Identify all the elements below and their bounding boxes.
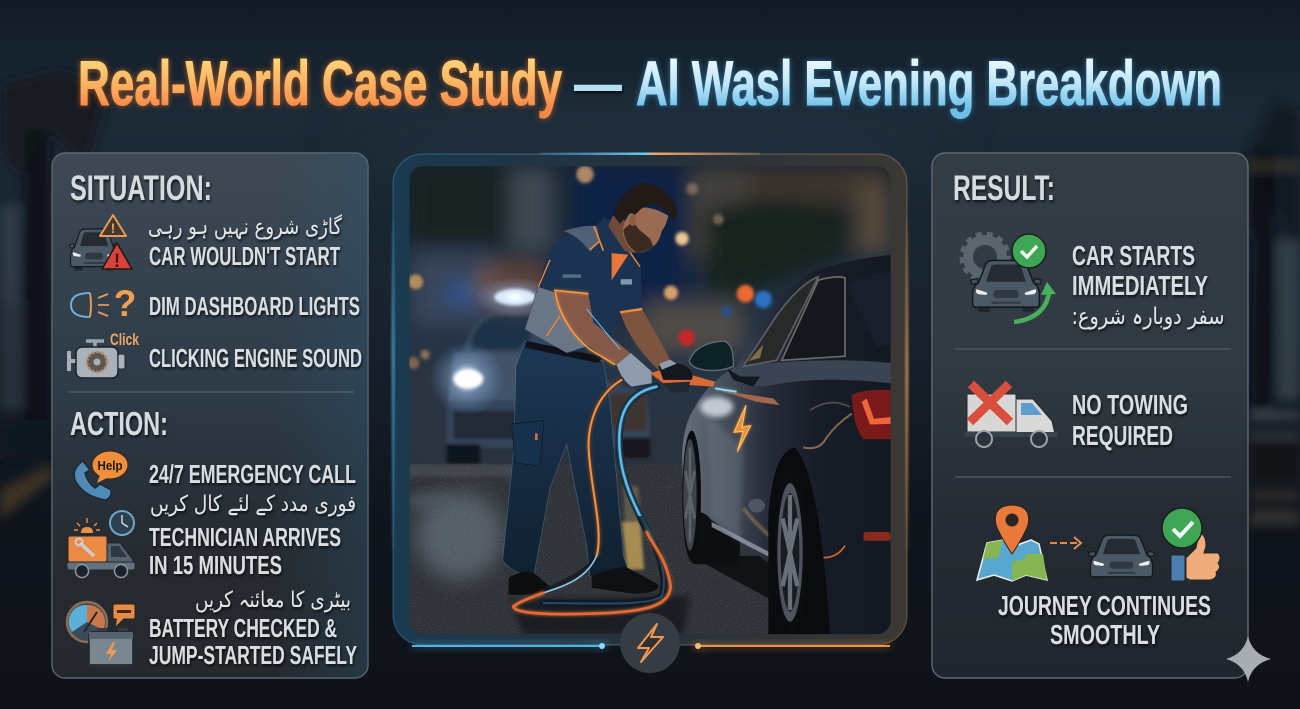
mirror xyxy=(727,368,760,387)
label: journey continues smoothly xyxy=(998,590,1211,650)
label: car starts immediately: CAR STARTS xyxy=(1072,240,1195,271)
label: technician arrives in 15 minutes: IN 15 MINUTES xyxy=(149,550,282,580)
label: battery checked and jump-started safely: JUMP-STARTED SAFELY xyxy=(149,640,357,670)
icon: phone with help bubble xyxy=(74,451,128,500)
label: technician arrives in 15 minutes: TECHNICIAN ARRIVES xyxy=(149,522,341,552)
label: battery checked and jump-started safely: BATTERY CHECKED & xyxy=(149,613,337,643)
bokeh and headlights xyxy=(407,166,772,415)
label: no towing required xyxy=(1072,389,1188,451)
urdu: battery inspection: بیٹری کا معائنہ کریں xyxy=(195,588,351,613)
label: no towing required: REQUIRED xyxy=(1072,420,1173,451)
shoes xyxy=(508,572,552,595)
icon: phone with help bubble: Help xyxy=(98,458,123,473)
label: car starts immediately: IMMEDIATELY xyxy=(1072,270,1208,301)
icon: gauge and battery xyxy=(67,602,135,667)
glowing bolt on car xyxy=(734,405,751,452)
body reflections xyxy=(700,397,733,417)
label: car starts immediately xyxy=(1072,240,1208,301)
icon: service truck with clock xyxy=(67,511,135,578)
jumper cables xyxy=(513,380,671,614)
icon: car with warnings: ! xyxy=(111,220,115,236)
icon: tow truck crossed out xyxy=(965,384,1058,447)
icon: car starts with check and arrow xyxy=(962,234,1056,322)
label: journey continues smoothly: SMOOTHLY xyxy=(1050,619,1160,650)
label: technician arrives in 15 minutes xyxy=(149,522,341,580)
icon: lightning bolt badge xyxy=(620,613,680,673)
label: no towing required: NO TOWING xyxy=(1072,389,1188,420)
urdu: car not starting: گاڑی شروع نہیں ہو رہی xyxy=(148,214,342,240)
label: 24/7 emergency call: 24/7 EMERGENCY CALL xyxy=(149,459,356,489)
urdu: journey restarts: سفر دوبارہ شروع: xyxy=(1072,304,1224,330)
blurred SUV behind xyxy=(447,309,650,464)
icon: car xyxy=(1088,535,1155,581)
label: dim dashboard lights: DIM DASHBOARD LIGHTS xyxy=(149,291,360,321)
blue accent line xyxy=(412,643,605,649)
arrow: dashed route arrow xyxy=(1050,537,1081,549)
car being jump-started xyxy=(682,255,891,634)
arm behind xyxy=(620,309,673,370)
icon: map with location pin xyxy=(977,505,1047,581)
photo: technician jump-starting a car at night xyxy=(407,166,891,634)
icon: engine with click: Click xyxy=(110,330,139,349)
icon: check and thumbs up xyxy=(1162,508,1220,581)
icon: dim headlight with question mark xyxy=(71,283,136,324)
label: battery checked and jump-started safely xyxy=(149,613,357,670)
background buildings and trees xyxy=(410,166,890,360)
label: car wouldn't start: CAR WOULDN'T START xyxy=(149,241,340,271)
icon: car with warnings: ! xyxy=(114,251,120,272)
technician xyxy=(503,183,780,595)
urdu: call for immediate help: فوری مدد کے لئے کال کریں xyxy=(150,492,356,517)
panel: situation and action xyxy=(52,153,368,678)
title dash: — xyxy=(574,49,622,119)
title part: Real-World Case Study: Real-World Case Study xyxy=(78,49,562,119)
wheel arches and wheels xyxy=(768,448,830,634)
trousers xyxy=(503,341,627,577)
side windows xyxy=(743,277,818,366)
panel: centre photo frame xyxy=(392,152,908,673)
heading: situation: SITUATION: xyxy=(70,169,212,208)
heading: result: RESULT: xyxy=(953,169,1055,208)
taillight xyxy=(852,390,891,439)
panel: result xyxy=(932,153,1248,678)
forearm xyxy=(554,291,630,366)
gloves and clamp xyxy=(617,353,652,387)
icon: engine with click xyxy=(69,330,139,378)
label: clicking engine sound: CLICKING ENGINE SOUND xyxy=(149,343,362,373)
neck and head xyxy=(608,216,635,253)
wet road with highlights xyxy=(407,464,891,634)
icon: car with warnings xyxy=(69,215,132,272)
icon: dim headlight with question mark: ? xyxy=(114,283,136,324)
orange accent line xyxy=(695,643,890,649)
icon: sparkle watermark xyxy=(1226,636,1271,682)
title xyxy=(78,49,1222,119)
label: journey continues smoothly: JOURNEY CONTINUES xyxy=(998,590,1211,621)
polo shirt xyxy=(525,217,642,353)
heading: action: ACTION: xyxy=(70,405,168,442)
